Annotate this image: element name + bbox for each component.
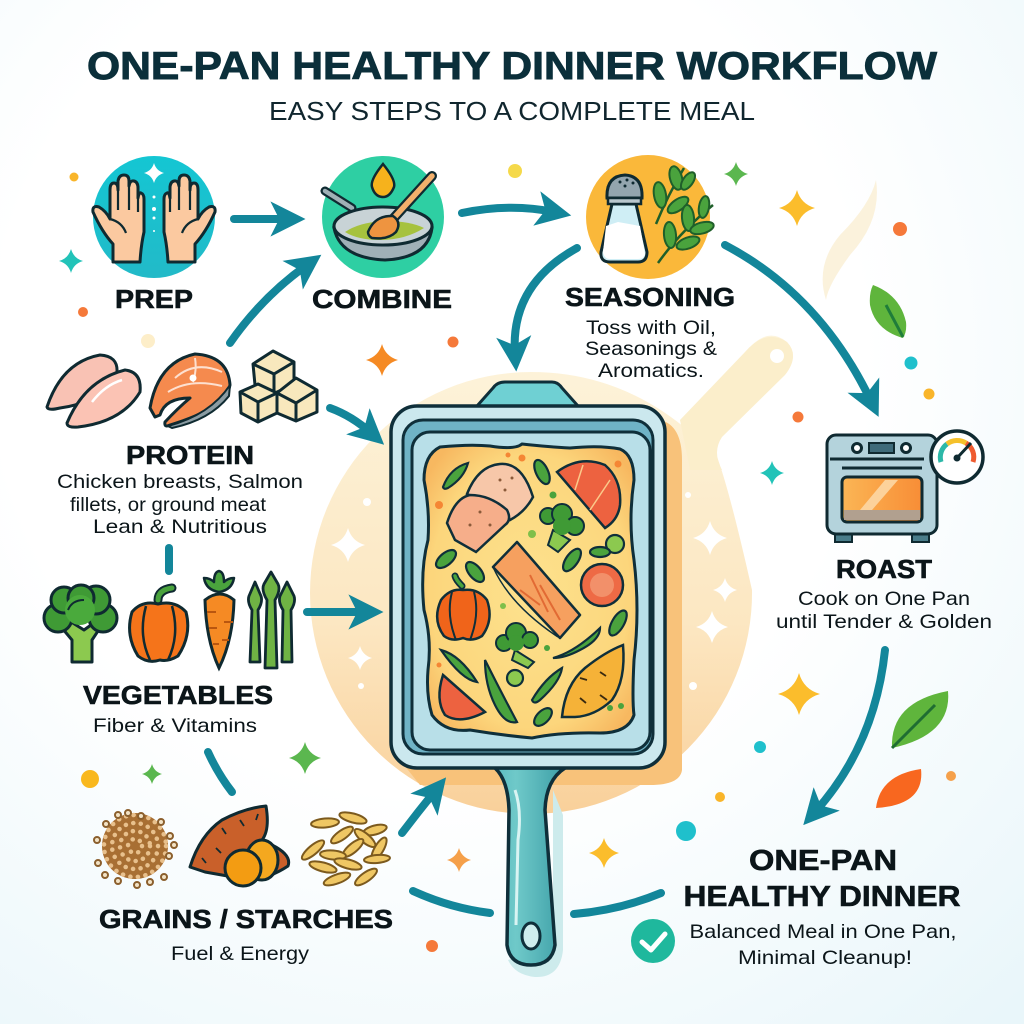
icon: chicken breasts [47,355,140,427]
arrow: protein to pan [330,408,371,433]
label: result: HEALTHY DINNER [684,881,961,913]
connector: protein to vegetables [165,548,173,571]
decorations: sparkles, leaves, dots [59,162,956,952]
text: seasoning description [585,317,717,382]
arrow: grains to pan [402,791,435,833]
ingredients: protein [47,351,317,538]
icon: sweet potato [190,806,289,886]
text: grains description: Fuel & Energy [171,943,309,965]
connector: handle to result [574,893,661,914]
salmon [493,542,580,638]
step: prep [93,156,215,314]
label: combine: COMBINE [312,284,452,314]
icon: carrot [204,571,234,668]
connector: grains to handle [413,891,490,913]
text: result description: Balanced Meal in One Pan, [690,921,956,943]
ingredients: grains and starches [94,806,393,965]
text: vegetables description: Fiber & Vitamins [93,715,257,737]
icon: check badge [631,919,675,963]
food [423,444,637,738]
arrow: protein to combine [230,265,307,343]
step: seasoning [565,155,735,382]
label: prep: PREP [115,284,193,314]
icon: pan with oil [322,156,444,278]
text: result description [690,921,956,969]
subtitle: EASY STEPS TO A COMPLETE MEAL [269,96,755,126]
sweet potato [562,645,624,717]
glow and ghost pan behind dish [310,336,793,977]
green beans and herbs [433,458,630,729]
icon: quinoa pile [94,810,177,888]
text: roast description: Cook on One Pan [798,588,970,610]
text: result description: Minimal Cleanup! [738,947,912,969]
label: seasoning: SEASONING [565,282,735,312]
icon: broccoli [44,585,117,662]
step: roast [776,431,992,633]
seasoning specks [435,452,624,711]
text: seasoning description: Toss with Oil, [586,317,716,339]
text: protein description [57,471,303,538]
arrow: prep to combine [234,215,288,223]
label: vegetables: VEGETABLES [83,680,273,710]
label: result: ONE-PAN [749,845,897,877]
arrow: seasoning to pan [515,248,577,354]
title: ONE-PAN HEALTHY DINNER WORKFLOW [87,45,937,88]
text: roast description [776,588,992,633]
label: protein: PROTEIN [126,440,254,470]
text: seasoning description: Aromatics. [598,360,704,382]
label: result [684,845,961,913]
bell pepper [437,576,490,640]
step: combine [312,156,452,314]
illustration: one-pan meal [391,382,665,965]
pan body [391,406,665,768]
icon: oven with gauge [827,431,983,542]
result: one-pan healthy dinner [631,845,961,969]
arrow: roast to result [815,650,885,812]
text: protein description: fillets, or ground meat [70,494,267,516]
connector: vegetables to grains [208,752,232,792]
label: roast: ROAST [836,554,932,584]
arrow: seasoning to roast [725,245,871,401]
broccoli [496,504,584,668]
icon: asparagus [248,572,295,668]
text: protein description: Lean & Nutritious [93,516,267,538]
chicken [447,464,533,552]
icon: tofu cubes [240,351,317,422]
icon: rice grains [299,810,390,888]
icon: bell pepper [130,588,188,661]
ingredients: vegetables [44,571,295,737]
pan top handle [477,382,578,406]
text: roast description: until Tender & Golden [776,611,992,633]
text: seasoning description: Seasonings & [585,338,717,360]
icon: clean hands [93,156,215,278]
icon: salt and herbs [586,155,715,279]
icon: salmon fillet [150,354,230,428]
label: grains and starches: GRAINS / STARCHES [99,904,393,934]
pan handle [495,768,565,965]
arrow: vegetables to pan [307,608,366,616]
tomato slices [439,461,623,719]
arrow: combine to seasoning [462,208,554,213]
text: protein description: Chicken breasts, Salmon [57,471,303,493]
